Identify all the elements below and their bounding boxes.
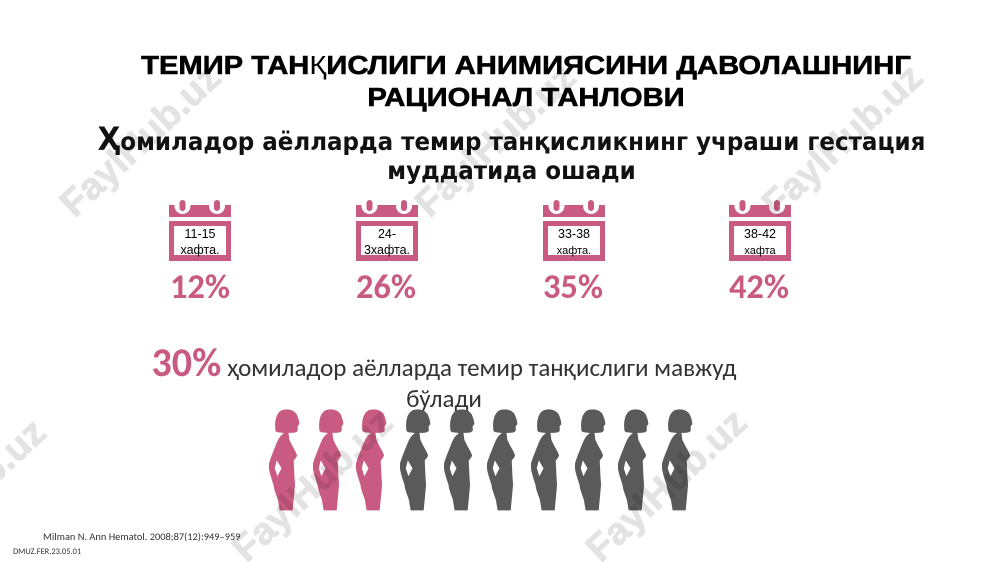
statement: 30 percent: 30% ҳомиладор аёлларда темир танқислиги мавжуд xyxy=(152,338,736,387)
document code: DMUZ.FER.23.05.01 xyxy=(13,547,81,557)
calendar: 24-3 weeks: 24- xyxy=(378,227,396,241)
calendar: 33-38 weeks xyxy=(543,200,605,261)
percent 26: 26% xyxy=(356,266,416,308)
title: ТЕМИР ТАНҚИСЛИГИ АНИМИЯСИНИ ДАВОЛАШНИНГ xyxy=(141,50,911,80)
watermarks: FaylHub.uz xyxy=(52,56,229,225)
statement: 30 percent: бўлади xyxy=(406,383,482,414)
watermarks: FaylHub.uz xyxy=(407,56,584,225)
subtitle: муддатида ошади xyxy=(387,156,636,185)
calendar: 11-15 weeks xyxy=(169,200,231,261)
reference citation: Milman N. Ann Hematol. 2008;87(12):949–959 xyxy=(43,530,241,543)
calendar: 38-42 weeks xyxy=(729,200,791,261)
calendar: 24-3 weeks: 3хафта. xyxy=(364,242,410,256)
calendar: 38-42 weeks: 38-42 xyxy=(744,227,776,241)
subtitle xyxy=(98,120,925,185)
statement: 30 percent xyxy=(152,338,736,414)
pictogram row: 3 of 10 women xyxy=(269,409,692,510)
calendar: 11-15 weeks: 11-15 xyxy=(184,227,216,241)
calendar: 33-38 weeks: 33-38 xyxy=(558,227,590,241)
calendar: 11-15 weeks: хафта. xyxy=(180,242,220,256)
percent 12: 12% xyxy=(170,266,230,308)
title xyxy=(141,50,911,112)
percent 42: 42% xyxy=(729,266,789,308)
watermarks: FaylHub.uz xyxy=(754,56,931,225)
calendar: 24-3 weeks xyxy=(356,200,418,261)
percent 35: 35% xyxy=(543,266,603,308)
title: РАЦИОНАЛ ТАНЛОВИ xyxy=(367,82,685,112)
subtitle: Ҳомиладор аёлларда темир танқисликнинг учраши гестация xyxy=(98,120,925,158)
calendar: 33-38 weeks: хафта. xyxy=(557,244,591,256)
calendar: 38-42 weeks: хафта xyxy=(744,244,776,256)
